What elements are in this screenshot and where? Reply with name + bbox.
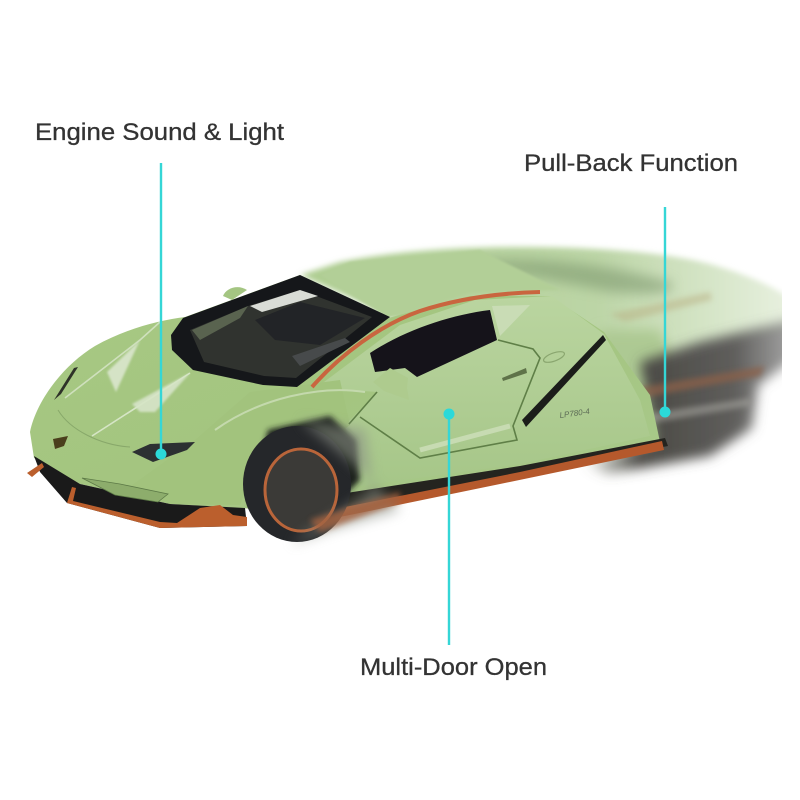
door lower highlight (420, 426, 510, 450)
door outline (349, 340, 540, 458)
label: Pull-Back Function (524, 150, 738, 177)
hood vent (54, 367, 78, 400)
motion blur trail: rear dark section (587, 314, 782, 481)
windshield (171, 275, 390, 387)
rim (265, 449, 337, 531)
label: Multi-Door Open (360, 654, 547, 681)
leader line (664, 207, 666, 411)
front splitter (27, 456, 247, 528)
sill motion streak (310, 492, 400, 532)
rear quarter glass (492, 305, 530, 336)
marker dot (660, 406, 670, 418)
callout: Engine Sound & Light (35, 119, 284, 460)
left mirror (223, 287, 247, 300)
front fender shade (125, 380, 350, 505)
headlight (132, 442, 195, 462)
label: Engine Sound & Light (35, 119, 284, 146)
side mirror (373, 368, 409, 400)
side window (370, 310, 497, 377)
roof above stripe (320, 250, 560, 318)
motion blur trail: upper body (300, 247, 795, 365)
car body (30, 275, 660, 512)
front logo (53, 436, 68, 449)
orange roof stripe (312, 292, 540, 387)
leader line (448, 414, 450, 645)
door handle (502, 368, 527, 381)
marker dot (156, 448, 166, 460)
car illustration (27, 247, 800, 545)
front wheel (243, 416, 400, 545)
wheel arch (250, 416, 360, 505)
leader line (160, 163, 162, 453)
underbody and sill (335, 438, 668, 518)
callout: Pull-Back Function (524, 150, 738, 418)
fuel cap (542, 349, 566, 365)
model badge: LP780-4 (559, 407, 591, 420)
marker dot (444, 408, 454, 420)
callout: Multi-Door Open (360, 408, 547, 681)
wheel motion blur (290, 420, 400, 545)
tyre (243, 426, 351, 542)
door side panel (316, 296, 650, 486)
hood highlights (58, 322, 365, 447)
front grille (82, 478, 168, 502)
side air intake (522, 335, 606, 427)
